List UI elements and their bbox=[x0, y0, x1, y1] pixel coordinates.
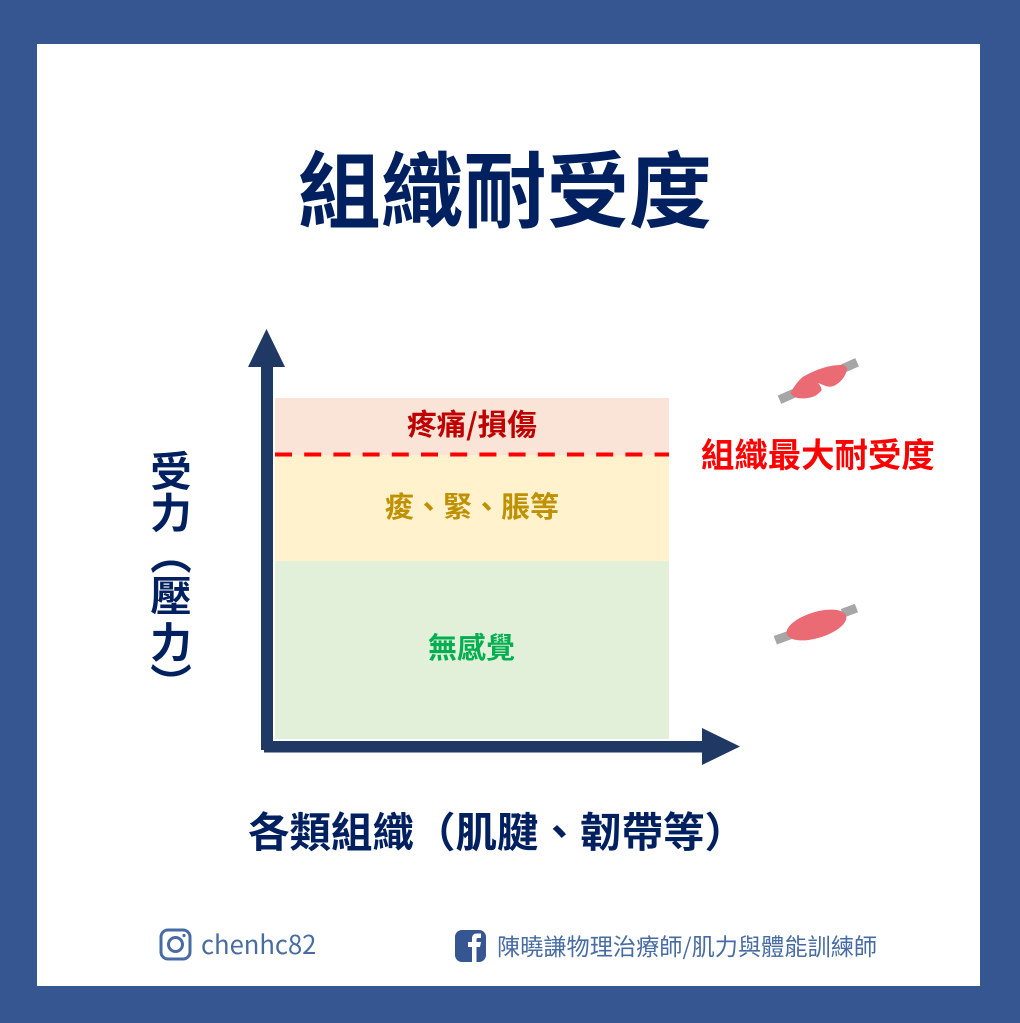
icon: relaxed muscle bbox=[774, 604, 858, 646]
icon: strained muscle bbox=[778, 358, 859, 404]
band: pain bbox=[275, 398, 669, 455]
x axis label: 各類組織（肌腱、韌帶等） bbox=[248, 799, 746, 859]
icon: facebook bbox=[455, 930, 486, 962]
label: soreness: 痠、緊、脹等 bbox=[385, 484, 559, 526]
y axis arrow bbox=[248, 329, 285, 750]
facebook page name: 陳曉謙物理治療師/肌力與體能訓練師 bbox=[497, 928, 877, 962]
title: 組織耐受度 bbox=[298, 125, 712, 245]
label: no feeling: 無感覺 bbox=[428, 625, 515, 667]
threshold label: 組織最大耐受度 bbox=[701, 428, 935, 477]
icon: instagram bbox=[161, 930, 190, 959]
band: no feeling bbox=[275, 561, 669, 739]
x axis arrow bbox=[264, 728, 740, 765]
threshold dashed line bbox=[275, 452, 669, 456]
band: soreness bbox=[275, 455, 669, 561]
instagram handle: chenhc82 bbox=[201, 925, 316, 962]
y axis label: 受力（ 壓 力） bbox=[141, 450, 201, 704]
label: pain: 疼痛/損傷 bbox=[407, 401, 537, 444]
